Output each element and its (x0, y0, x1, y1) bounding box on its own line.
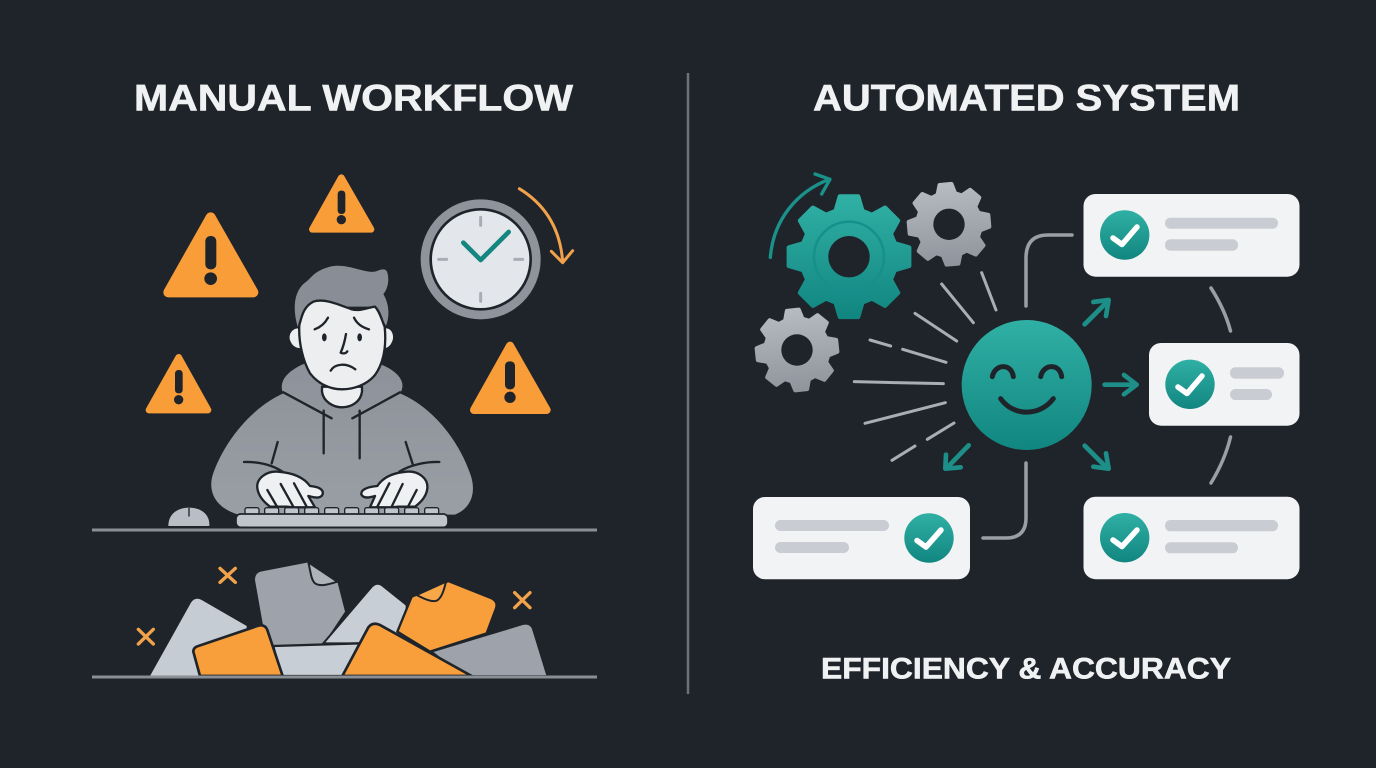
facial features (315, 318, 369, 371)
icon: gray gear lower (753, 306, 841, 394)
arrow: orange clockwise (519, 189, 573, 263)
figure: stressed person typing (168, 266, 473, 527)
orange document with fold (397, 581, 497, 652)
arrow: to middle card (1105, 375, 1137, 394)
caption: efficiency and accuracy: EFFICIENCY & ACCURACY (821, 652, 1231, 686)
icon: smiling face (962, 320, 1092, 450)
card: middle (1149, 343, 1300, 426)
icon: warning triangle right (474, 346, 547, 410)
radiating lines (854, 273, 996, 460)
icon: gray gear upper (906, 181, 992, 268)
neck (322, 387, 362, 407)
mouse (168, 508, 209, 526)
icon: warning triangle left (149, 357, 208, 410)
panel: manual workflow (92, 78, 597, 677)
gray sheet right (432, 624, 547, 676)
hoodie (211, 363, 473, 515)
light sheet center (273, 643, 361, 676)
card: bottom (1084, 497, 1300, 579)
gray document with fold (255, 562, 345, 647)
ears (290, 328, 302, 348)
keyboard (236, 508, 448, 527)
hood collar and drawstrings (244, 392, 439, 473)
desk line (92, 528, 597, 532)
orange sheet front left (193, 625, 283, 676)
hair (295, 266, 388, 327)
icon: warning triangle large (168, 217, 253, 292)
heading: manual workflow: MANUAL WORKFLOW (134, 78, 573, 119)
panel: automated system (753, 78, 1300, 685)
orange sheet front center (342, 624, 472, 676)
icon: teal gear (789, 197, 909, 317)
arrow: to left card (945, 445, 969, 469)
arrow: to top card (1085, 300, 1109, 324)
card: top (1084, 194, 1300, 277)
light sheet left (150, 599, 247, 676)
icon: wall clock (421, 199, 541, 319)
face (299, 301, 385, 389)
floor line (92, 676, 597, 678)
hands (257, 472, 427, 507)
pile of scattered documents (138, 562, 547, 676)
icon: warning triangle top (312, 178, 371, 229)
connector lines (983, 235, 1230, 538)
light sheet right (323, 584, 407, 643)
arrow: to bottom card (1085, 446, 1109, 469)
error marks (138, 568, 530, 644)
heading: automated system: AUTOMATED SYSTEM (813, 78, 1240, 119)
arrow: gear rotation (770, 174, 830, 257)
card: left (753, 497, 970, 579)
